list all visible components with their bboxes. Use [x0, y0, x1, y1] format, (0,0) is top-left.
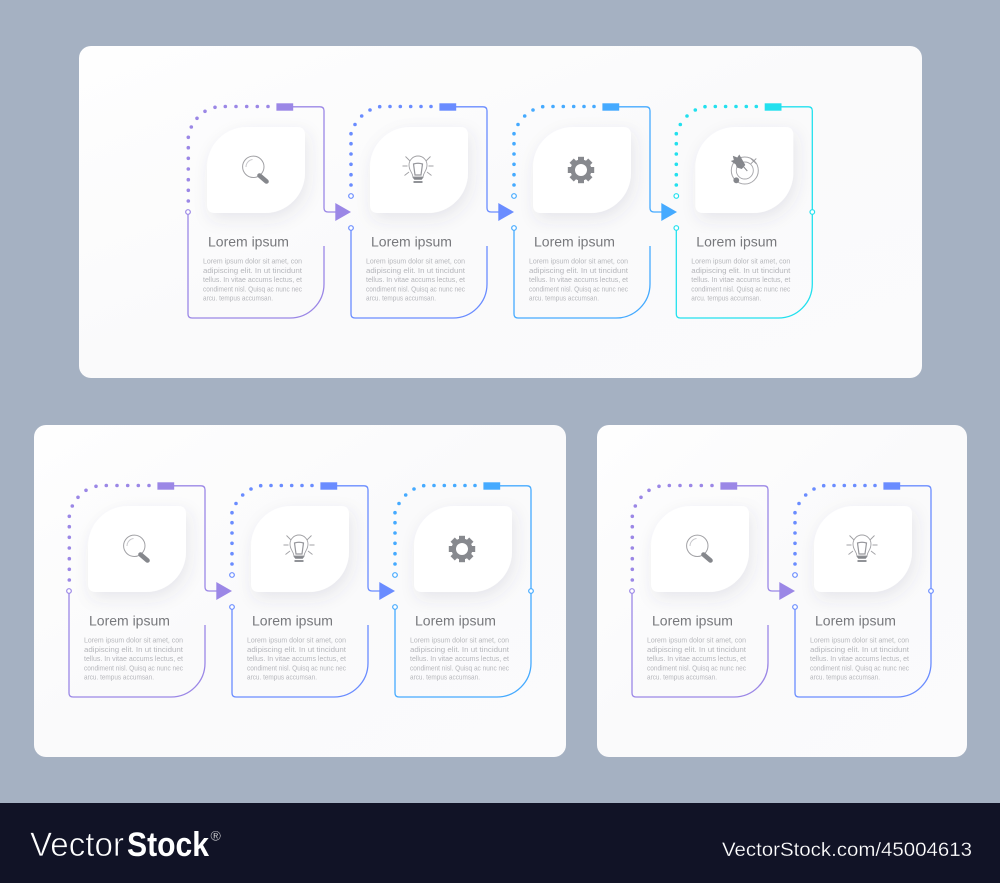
step 2 of 4 [349, 103, 514, 318]
step title: Lorem ipsum [252, 612, 333, 628]
step body text: condiment nisl. Quisq ac nunc nec [647, 664, 746, 672]
panel: two-step timeline [597, 425, 967, 757]
step body text: adipiscing elit. In ut tincidunt [84, 645, 183, 654]
icon: magnifier [243, 156, 266, 182]
panel: four-step timeline [79, 46, 922, 378]
footer logo [30, 826, 222, 864]
icon: light bulb [402, 156, 434, 182]
step body text: arcu. tempus accumsan. [410, 673, 480, 682]
step body text: Lorem ipsum dolor sit amet, con [810, 636, 909, 645]
step body text [691, 257, 791, 303]
step body text: condiment nisl. Quisq ac nunc nec [529, 284, 628, 294]
icon: light bulb [284, 535, 314, 561]
step title: Lorem ipsum [89, 612, 170, 628]
step body text: tellus. In vitae accums lectus, et [366, 275, 465, 284]
step body text: arcu. tempus accumsan. [529, 294, 599, 303]
step title: Lorem ipsum [534, 233, 615, 249]
step body text [810, 636, 909, 682]
step body text: adipiscing elit. In ut tincidunt [691, 266, 790, 275]
step 1 of 4 [186, 103, 351, 318]
step title: Lorem ipsum [815, 612, 896, 628]
step body text: Lorem ipsum dolor sit amet, con [691, 257, 790, 266]
step body text: adipiscing elit. In ut tincidunt [410, 645, 509, 654]
step body text: tellus. In vitae accums lectus, et [203, 275, 302, 284]
step body text: tellus. In vitae accums lectus, et [84, 654, 183, 663]
step body text: Lorem ipsum dolor sit amet, con [529, 257, 628, 266]
step body text: Lorem ipsum dolor sit amet, con [203, 257, 302, 266]
icon: light bulb [846, 535, 878, 561]
step 1 of 2 [630, 482, 795, 697]
step body text: arcu. tempus accumsan. [84, 673, 154, 682]
step body text: arcu. tempus accumsan. [647, 673, 717, 682]
step body text: Lorem ipsum dolor sit amet, con [366, 257, 465, 266]
step 3 of 3 [393, 482, 533, 697]
step body text [647, 636, 746, 682]
step body text [84, 636, 183, 682]
step body text [203, 257, 302, 303]
step body text: condiment nisl. Quisq ac nunc nec [691, 284, 791, 294]
step body text: arcu. tempus accumsan. [810, 673, 880, 682]
step body text: tellus. In vitae accums lectus, et [691, 275, 790, 284]
icon: magnifier [124, 535, 148, 560]
step body text: arcu. tempus accumsan. [366, 294, 436, 303]
footer image id: VectorStock.com/45004613 [722, 839, 972, 861]
footer logo: Vector [30, 826, 124, 864]
step body text: condiment nisl. Quisq ac nunc nec [203, 284, 302, 294]
icon: gear [568, 157, 594, 183]
step body text [247, 636, 346, 682]
step body text: tellus. In vitae accums lectus, et [410, 654, 509, 663]
step body text: Lorem ipsum dolor sit amet, con [410, 636, 509, 645]
step body text: tellus. In vitae accums lectus, et [247, 654, 346, 663]
step body text: tellus. In vitae accums lectus, et [529, 275, 628, 284]
step title: Lorem ipsum [208, 233, 289, 249]
step body text: tellus. In vitae accums lectus, et [647, 654, 746, 663]
step body text: Lorem ipsum dolor sit amet, con [247, 636, 346, 645]
icon: gear [449, 536, 475, 562]
icon: target with arrow [731, 154, 758, 184]
step body text: Lorem ipsum dolor sit amet, con [647, 636, 746, 645]
step body text [529, 257, 628, 303]
icon: magnifier [687, 535, 710, 560]
step body text: arcu. tempus accumsan. [247, 673, 317, 682]
step body text: condiment nisl. Quisq ac nunc nec [84, 664, 183, 672]
step body text: Lorem ipsum dolor sit amet, con [84, 636, 183, 645]
step body text: adipiscing elit. In ut tincidunt [529, 266, 628, 275]
step body text: adipiscing elit. In ut tincidunt [366, 266, 465, 275]
step 2 of 3 [230, 482, 395, 697]
step 2 of 2 [793, 482, 933, 697]
step body text [410, 636, 509, 682]
step body text: condiment nisl. Quisq ac nunc nec [410, 664, 509, 672]
step title: Lorem ipsum [371, 233, 452, 249]
step 4 of 4 [674, 103, 815, 318]
step body text [366, 257, 465, 303]
step body text: adipiscing elit. In ut tincidunt [647, 645, 746, 654]
step body text: arcu. tempus accumsan. [691, 294, 761, 303]
step body text: adipiscing elit. In ut tincidunt [247, 645, 346, 654]
footer bar [0, 803, 1000, 883]
step body text: tellus. In vitae accums lectus, et [810, 654, 909, 663]
step body text: condiment nisl. Quisq ac nunc nec [366, 284, 465, 294]
footer logo: ® [210, 828, 222, 844]
step title: Lorem ipsum [696, 233, 777, 249]
step 1 of 3 [67, 482, 232, 697]
footer logo: Stock [127, 826, 210, 864]
step title: Lorem ipsum [652, 612, 733, 628]
step body text: condiment nisl. Quisq ac nunc nec [247, 664, 346, 672]
step body text: arcu. tempus accumsan. [203, 294, 273, 303]
step 3 of 4 [512, 103, 677, 318]
step body text: condiment nisl. Quisq ac nunc nec [810, 664, 909, 672]
step body text: adipiscing elit. In ut tincidunt [203, 266, 302, 275]
panel: three-step timeline [34, 425, 566, 757]
step body text: adipiscing elit. In ut tincidunt [810, 645, 909, 654]
step title: Lorem ipsum [415, 612, 496, 628]
